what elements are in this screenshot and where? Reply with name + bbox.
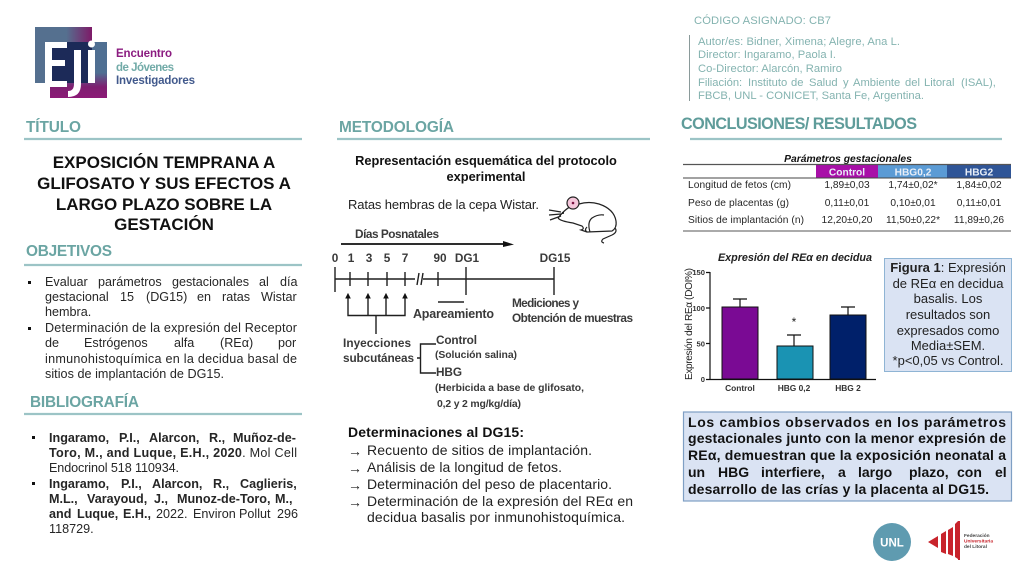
callout: conclusions: REα, demuestran que la exposición neonatal a: [688, 447, 1006, 463]
objectives list: Wistar: [261, 290, 297, 304]
bibliography list: Environ: [193, 507, 236, 521]
logo: UNL: UNL: [880, 538, 904, 550]
objectives list: Determinación de la expresión del Receptor: [45, 321, 297, 335]
authors block: de: [791, 77, 803, 89]
day numbers: 5: [384, 251, 391, 265]
callout: conclusions: [684, 412, 1012, 501]
callout: figure caption: de REα en decidua: [893, 276, 1004, 291]
callout: conclusions: Los cambios observados en los parámetros: [688, 414, 1006, 430]
day numbers: 0: [332, 251, 339, 265]
table: parámetros gestacionales: 1,89±0,03: [824, 180, 870, 191]
determinations list: decidua basalis por inmunohistoquímica.: [367, 509, 625, 525]
day numbers: 90: [433, 251, 447, 265]
determinations list: [348, 424, 633, 525]
authors block: FBCB, UNL - CONICET, Santa Fe, Argentina.: [698, 90, 924, 102]
authors block: Filiación:: [698, 77, 742, 89]
injections: subcutáneas: [343, 351, 414, 365]
timeline diagram: [332, 227, 633, 410]
title text: LARGO PLAZO SOBRE LA: [56, 195, 272, 214]
table: parámetros gestacionales: 11,50±0,22*: [886, 215, 940, 226]
bar chart: expresión del REα: Expresión del REα en decidua: [718, 252, 872, 264]
bibliography list: [32, 431, 298, 536]
bibliography list: Varayoud,: [87, 492, 147, 506]
bar chart: expresión del REα: 50: [697, 340, 705, 348]
objectives list: (DG15): [146, 290, 187, 304]
day numbers: 1: [348, 251, 355, 265]
determinations list: Determinaciones al DG15:: [348, 424, 524, 440]
callout: conclusions: gestacionales junto con la menor expresión de: [688, 430, 1006, 446]
callout: conclusions: HBG: [718, 464, 749, 480]
authors block: del: [905, 77, 920, 89]
objectives list: ratas: [222, 290, 250, 304]
day numbers: DG15: [540, 251, 571, 265]
callout: conclusions: el: [995, 464, 1007, 480]
assigned code: CÓDIGO ASIGNADO: CB7: [694, 14, 831, 27]
callout: conclusions: a: [838, 464, 846, 480]
determinations list: Determinación del peso de placentario.: [367, 476, 612, 492]
bibliography list: P.I.,: [121, 477, 142, 491]
label: días posnatales arrow: [341, 227, 514, 247]
logo: Encuentro de Jóvenes Investigadores: Encuentro: [116, 48, 172, 60]
bibliography list: Alarcon,: [149, 431, 199, 445]
objectives list: de: [45, 336, 59, 350]
callout: figure caption: expresados como: [897, 323, 999, 338]
callout: conclusions: un: [688, 464, 705, 480]
treatment bracket: [417, 344, 436, 373]
rat strain label: Ratas hembras de la cepa Wistar.: [348, 197, 539, 212]
icon: rat: [549, 197, 616, 243]
objectives list: inmunohistoquímica en la decidua basal de: [45, 352, 297, 366]
table: parámetros gestacionales: 0,11±0,01: [825, 198, 870, 209]
bibliography list: 296: [277, 507, 298, 521]
objectives list: por: [278, 336, 296, 350]
bibliography list: P.I.,: [119, 431, 140, 445]
bibliography list: M.L.,: [49, 492, 78, 506]
injections: Inyecciones: [343, 336, 411, 350]
objectives list: (REα): [220, 336, 253, 350]
treatments: [435, 333, 584, 410]
logo: UNL: [873, 523, 911, 561]
objectives list: Evaluar: [45, 275, 88, 289]
callout: figure caption: resultados son: [906, 307, 990, 322]
heading: Metodología: METODOLOGÍA: [339, 119, 454, 136]
authors block: [690, 35, 996, 102]
bibliography list: Ingaramo,: [49, 431, 109, 445]
objectives list: [28, 275, 298, 381]
authors block: Salud: [809, 77, 838, 89]
title text: GLIFOSATO Y SUS EFECTOS A: [37, 174, 291, 193]
authors block: Ambiente: [853, 77, 900, 89]
day numbers: DG1: [455, 251, 480, 265]
callout: figure caption: Media±SEM.: [911, 338, 985, 353]
axis with ticks: [335, 267, 554, 295]
heading: Título: TÍTULO: [26, 119, 81, 136]
bar chart: expresión del REα: Expresión del REα (DOI%): [684, 268, 695, 380]
bibliography list: Luque,: [77, 507, 118, 521]
injection arrows: [346, 294, 407, 334]
treatments: (Solución salina): [435, 350, 517, 361]
table: parámetros gestacionales: HBG2: [965, 168, 993, 178]
protocol subtitle: experimental: [447, 169, 525, 184]
label: días posnatales arrow: Días Posnatales: [355, 227, 439, 241]
bibliography list: 118729.: [49, 522, 94, 536]
callout: conclusions: interfiere,: [761, 464, 825, 480]
measurements: Obtención de muestras: [512, 311, 633, 325]
injections: [343, 336, 414, 365]
bibliography list: J.,: [154, 492, 168, 506]
authors block: Instituto: [748, 77, 787, 89]
logo: Federación Universitaria del Litoral: [928, 521, 993, 560]
determinations list: →: [348, 494, 362, 510]
callout: figure caption: basalis. Los: [914, 291, 983, 306]
logo: Federación Universitaria del Litoral: del Litoral: [964, 544, 987, 550]
bibliography list: R.,: [213, 477, 229, 491]
bar chart: expresión del REα: HBG 2: [835, 383, 861, 393]
logo: Encuentro de Jóvenes Investigadores: de Jóvenes: [116, 62, 174, 74]
bar chart: expresión del REα: 0: [701, 375, 705, 384]
bar: HBG 0,2: [777, 315, 813, 379]
bar chart: expresión del REα: [684, 252, 876, 393]
bibliography list: R.,: [209, 431, 225, 445]
objectives list: sitios de implantación de DG15.: [45, 367, 224, 381]
determinations list: Recuento de sitios de implantación.: [367, 442, 592, 458]
treatments: Control: [436, 333, 477, 347]
bibliography list: Endocrinol 518 110934.: [49, 461, 179, 475]
bibliography list: E.H.,: [123, 507, 151, 521]
authors block: Director: Ingaramo, Paola I.: [698, 49, 836, 61]
logo: Encuentro de Jóvenes Investigadores: Investigadores: [116, 75, 195, 87]
determinations list: →: [348, 443, 362, 459]
table: parámetros gestacionales: Longitud de fetos (cm): [688, 180, 791, 191]
objectives list: día: [280, 275, 298, 289]
callout: figure caption: Figura 1: Expresión: [890, 260, 1006, 275]
determinations list: Determinación de la expresión del REα en: [367, 493, 633, 509]
bar chart: expresión del REα: 150: [692, 268, 705, 277]
bibliography list: 2022.: [156, 507, 188, 521]
objectives list: 15: [120, 290, 134, 304]
table: parámetros gestacionales: 0,10±0,01: [890, 198, 936, 209]
heading: Conclusiones / Resultados: CONCLUSIONES/ RESULTADOS: [681, 115, 917, 133]
table: parámetros gestacionales: Control: [829, 168, 865, 178]
table: parámetros gestacionales: Parámetros gestacionales: [784, 154, 912, 165]
callout: conclusions: con: [957, 464, 982, 480]
bibliography list: Pollut: [239, 507, 271, 521]
bar chart: expresión del REα: Control: [725, 383, 755, 393]
authors block: y: [843, 77, 849, 89]
heading: Objetivos: OBJETIVOS: [26, 243, 112, 260]
determinations list: →: [348, 477, 362, 493]
treatments: HBG: [436, 365, 462, 379]
callout: conclusions: largo: [858, 464, 892, 480]
objectives list: alfa: [174, 336, 194, 350]
heading: Bibliografía: BIBLIOGRAFÍA: [30, 394, 139, 411]
bibliography list: Caglieris,: [240, 477, 297, 491]
objectives list: parámetros: [98, 275, 162, 289]
bar: HBG 2: [830, 307, 866, 379]
logo: Federación Universitaria del Litoral: Federación: [964, 533, 990, 539]
table: parámetros gestacionales: Peso de placentas (g): [688, 198, 789, 209]
authors block: Litoral: [924, 77, 954, 89]
objectives list: en: [197, 290, 211, 304]
bar chart: expresión del REα: 100: [692, 304, 705, 313]
title text: GESTACIÓN: [114, 215, 214, 234]
objectives list: gestacionales: [172, 275, 249, 289]
title text: EXPOSICIÓN TEMPRANA A: [53, 153, 275, 172]
measurements: Mediciones y: [512, 296, 579, 310]
bibliography list: Toro, M., and Luque, E.H., 2020. Mol Cell: [49, 446, 297, 460]
bibliography list: Ingaramo,: [49, 477, 109, 491]
callout: figure caption: *p<0,05 vs Control.: [893, 353, 1003, 368]
bibliography list: and: [49, 507, 71, 521]
authors block: Co-Director: Alarcón, Ramiro: [698, 63, 842, 75]
bibliography list: M.,: [275, 492, 292, 506]
day numbers: [332, 251, 571, 265]
treatments: 0,2 y 2 mg/kg/día): [437, 399, 521, 410]
table: parámetros gestacionales: [683, 154, 1011, 231]
table: parámetros gestacionales: 0,11±0,01: [957, 198, 1002, 209]
bibliography list: Muñoz-de-: [233, 431, 296, 445]
objectives list: al: [259, 275, 269, 289]
authors block: (ISAL),: [961, 77, 996, 89]
table: parámetros gestacionales: 1,74±0,02*: [888, 180, 938, 191]
bar: control: [722, 299, 758, 379]
table: parámetros gestacionales: Sitios de implantación (n): [688, 215, 804, 226]
mating: Apareamiento: [413, 307, 494, 321]
table: parámetros gestacionales: HBG0,2: [895, 168, 932, 178]
objectives list: hembra.: [45, 305, 91, 319]
objectives list: Estrógenos: [84, 336, 148, 350]
bibliography list: Munoz-de-Toro,: [177, 492, 270, 506]
determinations list: Análisis de la longitud de fetos.: [367, 459, 562, 475]
bibliography list: Alarcon,: [152, 477, 202, 491]
callout: conclusions: plazo,: [909, 464, 949, 480]
bar: HBG 0,2: *: [792, 315, 797, 329]
determinations list: →: [348, 460, 362, 476]
treatments: (Herbicida a base de glifosato,: [435, 383, 584, 394]
objectives list: gestacional: [45, 290, 109, 304]
bar chart: expresión del REα: HBG 0,2: [778, 383, 811, 393]
table: parámetros gestacionales: 1,84±0,02: [956, 180, 1002, 191]
logo: Federación Universitaria del Litoral: Universitaria: [964, 538, 993, 544]
day numbers: 7: [402, 251, 409, 265]
table: parámetros gestacionales: 12,20±0,20: [822, 215, 873, 226]
callout: figure caption: [884, 258, 1012, 372]
table: parámetros gestacionales: 11,89±0,26: [954, 215, 1004, 226]
measurements: [512, 296, 633, 325]
authors block: Autor/es: Bidner, Ximena; Alegre, Ana L.: [698, 36, 900, 48]
protocol subtitle: Representación esquemática del protocolo: [355, 153, 617, 168]
logo: Encuentro de Jóvenes Investigadores: [35, 27, 195, 98]
callout: conclusions: desarrollo de las crías y la placenta al DG15.: [688, 481, 989, 497]
day numbers: 3: [366, 251, 373, 265]
